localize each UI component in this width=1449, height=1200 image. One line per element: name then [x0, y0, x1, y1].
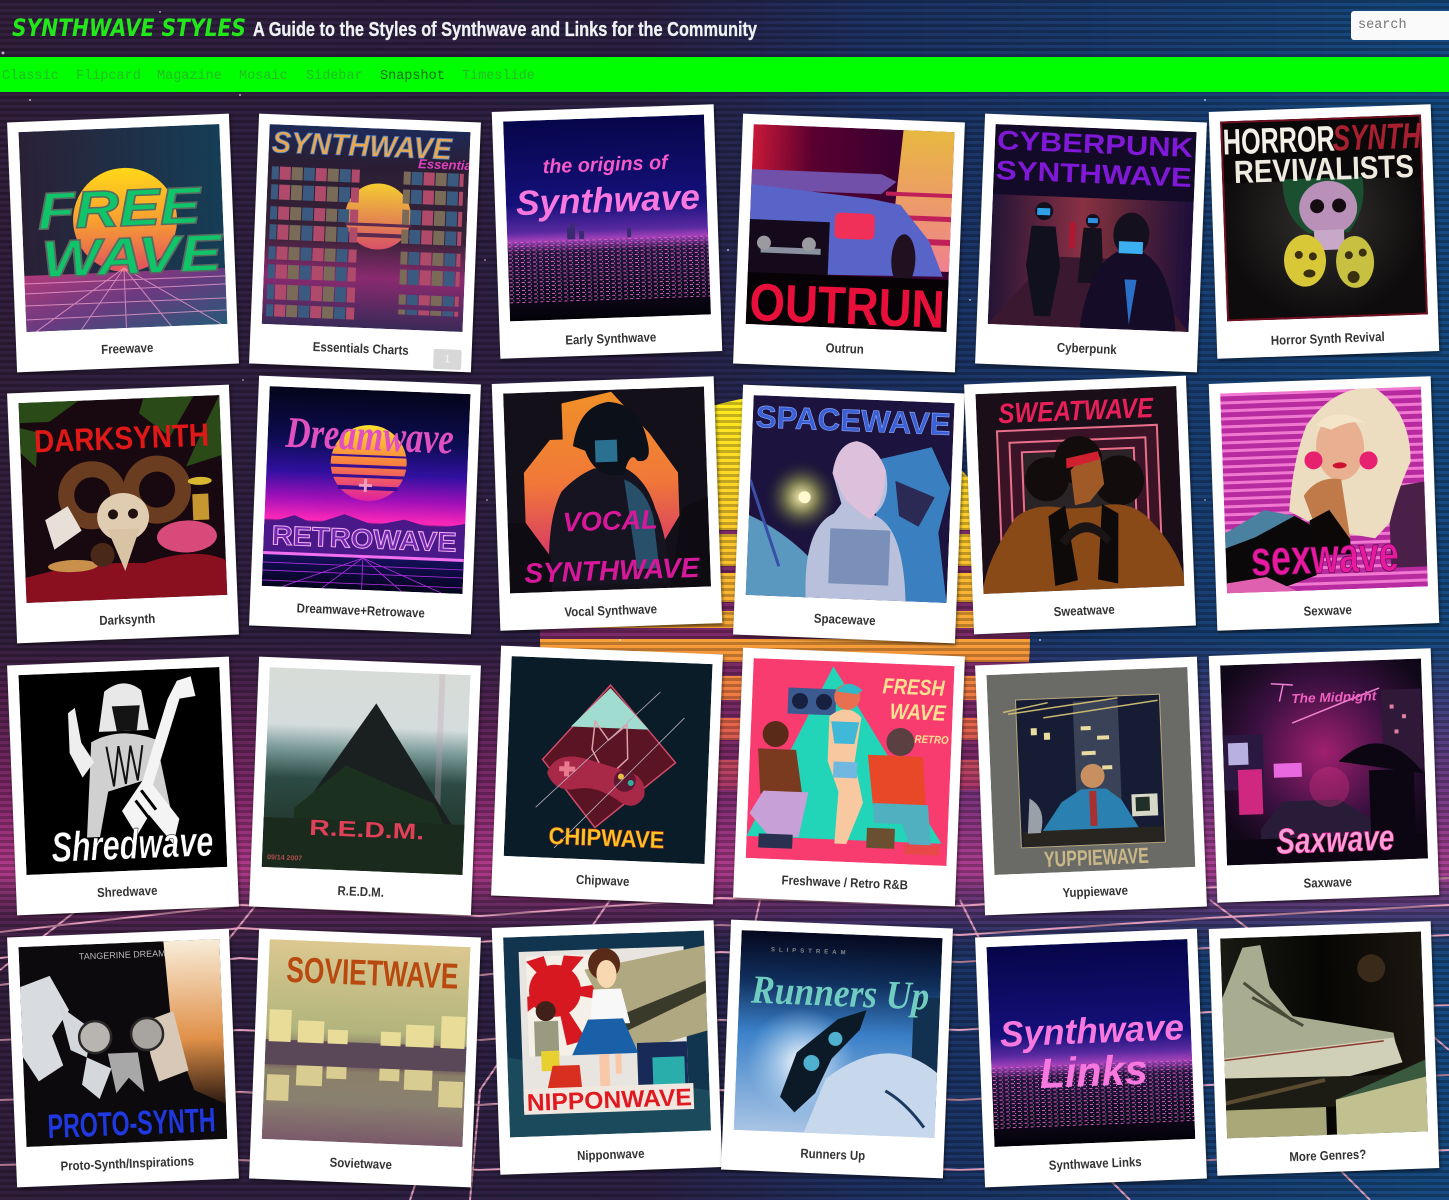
card: Sweatwave: SWEATWAVE	[998, 392, 1155, 429]
card: Dreamwave+Retrowave: +	[357, 470, 374, 500]
card: Essentials Charts	[249, 114, 481, 372]
card: Sexwave: Sexwave	[1303, 602, 1352, 619]
card: Yuppiewave	[975, 657, 1207, 915]
title	[12, 14, 758, 42]
card: Horror Synth Revival	[1209, 104, 1439, 359]
card: Sweatwave	[964, 376, 1196, 634]
card: Freewave	[7, 114, 239, 372]
card: More Genres?	[1209, 921, 1439, 1176]
card: Saxwave: Saxwave	[1276, 817, 1395, 862]
comment bubble: 1	[444, 353, 451, 366]
card: Proto-Synth/Inspirations: Proto-Synth/Inspirations	[60, 1153, 194, 1174]
card: Dreamwave+Retrowave	[249, 376, 481, 634]
card: Essentials Charts: SYNTHWAVE	[271, 126, 453, 166]
navigation bar: Snapshot	[380, 69, 445, 84]
navigation bar: Mosaic	[239, 69, 288, 84]
card: Chipwave: CHIPWAVE	[548, 823, 665, 854]
card: Darksynth: Darksynth	[99, 611, 155, 628]
card: Essentials Charts: Essentials Charts	[312, 339, 409, 358]
card: Nipponwave: NIPPONWAVE	[526, 1084, 692, 1117]
card: Darksynth	[7, 385, 239, 643]
card: R.E.D.M.: 09/14 2007	[267, 854, 302, 863]
card: Synthwave Links	[975, 929, 1207, 1187]
card: Outrun: Outrun	[825, 340, 864, 357]
card: Runners Up: SLIPSTREAM	[771, 947, 850, 956]
card: Saxwave: Saxwave	[1303, 874, 1352, 891]
card: Freshwave / Retro R&B: WAVE	[889, 699, 947, 726]
navigation bar: Timeslide	[462, 69, 535, 84]
card: Vocal Synthwave: SYNTHWAVE	[524, 552, 701, 589]
card: Dreamwave+Retrowave: RETROWAVE	[271, 520, 457, 558]
card: Yuppiewave: Yuppiewave	[1062, 883, 1128, 900]
comment bubble	[433, 349, 462, 370]
card: Saxwave	[1209, 648, 1439, 903]
card: Early Synthwave: Synthwave	[515, 178, 701, 223]
card: Vocal Synthwave: Vocal Synthwave	[564, 601, 657, 620]
card: Cyberpunk: Cyberpunk	[1057, 340, 1117, 357]
card: Freewave: WAVE	[40, 224, 224, 289]
card: Chipwave	[491, 646, 723, 904]
card: Spacewave	[733, 385, 965, 643]
card: Cyberpunk: SYNTHWAVE	[995, 155, 1192, 193]
card: Cyberpunk	[975, 114, 1207, 372]
card: Freshwave / Retro R&B: Freshwave / Retro R&B	[781, 872, 908, 892]
card: Sweatwave: Sweatwave	[1053, 602, 1115, 619]
card: Nipponwave	[492, 920, 722, 1175]
card: Early Synthwave	[492, 104, 722, 359]
card: Sovietwave	[249, 929, 481, 1187]
title: SYNTHWAVE STYLES	[12, 14, 246, 42]
search box	[1351, 11, 1449, 40]
navigation bar: Magazine	[157, 69, 222, 84]
card: Spacewave: Spacewave	[814, 611, 876, 628]
card: Chipwave: Chipwave	[576, 872, 630, 889]
card: More Genres?: More Genres?	[1289, 1147, 1366, 1164]
card: Freewave: Freewave	[101, 340, 154, 357]
card: Freewave: FREE	[37, 177, 203, 241]
card: Spacewave: SPACEWAVE	[755, 399, 951, 442]
card: Freshwave / Retro R&B	[733, 648, 965, 906]
card: Proto-Synth/Inspirations	[7, 929, 239, 1187]
card: Early Synthwave: the origins of	[542, 152, 670, 178]
card: Saxwave: The Midnight	[1291, 688, 1377, 706]
navigation bar	[0, 57, 1449, 92]
card: Yuppiewave: YUPPIEWAVE	[1043, 843, 1149, 872]
card: Sexwave	[1209, 376, 1439, 631]
card: Runners Up	[721, 920, 953, 1178]
card: Vocal Synthwave: VOCAL	[562, 504, 658, 538]
card: Horror Synth Revival: HORROR	[1222, 118, 1335, 162]
card: Dreamwave+Retrowave: Dreamwave+Retrowave	[296, 600, 425, 620]
card: Shredwave	[7, 657, 239, 915]
card: Synthwave Links: Synthwave Links	[1049, 1154, 1142, 1173]
card: R.E.D.M.	[249, 657, 481, 915]
card: Freshwave / Retro R&B: RETRO	[914, 734, 949, 747]
card: Proto-Synth/Inspirations: TANGERINE DREAM	[79, 948, 166, 962]
card: Early Synthwave: Early Synthwave	[565, 329, 656, 348]
search box: search	[1358, 18, 1407, 33]
card: Vocal Synthwave	[492, 376, 722, 631]
card: Horror Synth Revival: Horror Synth Revival	[1271, 329, 1385, 348]
card: R.E.D.M.: R.E.D.M.	[337, 883, 384, 900]
card: Outrun	[733, 114, 965, 372]
navigation bar: Classic	[2, 69, 59, 84]
card: Cyberpunk: CYBERPUNK	[996, 125, 1194, 163]
card: Synthwave Links: Synthwave	[999, 1006, 1185, 1055]
navigation bar: Sidebar	[306, 69, 363, 84]
card: Shredwave: Shredwave	[97, 883, 158, 900]
card: Nipponwave: Nipponwave	[577, 1146, 645, 1163]
card: Synthwave Links: Links	[1039, 1046, 1148, 1097]
navigation bar: Flipcard	[76, 69, 141, 84]
card: Runners Up: Runners Up	[800, 1146, 865, 1163]
card: Sovietwave: Sovietwave	[329, 1155, 392, 1172]
card: R.E.D.M.: R.E.D.M.	[309, 815, 425, 844]
